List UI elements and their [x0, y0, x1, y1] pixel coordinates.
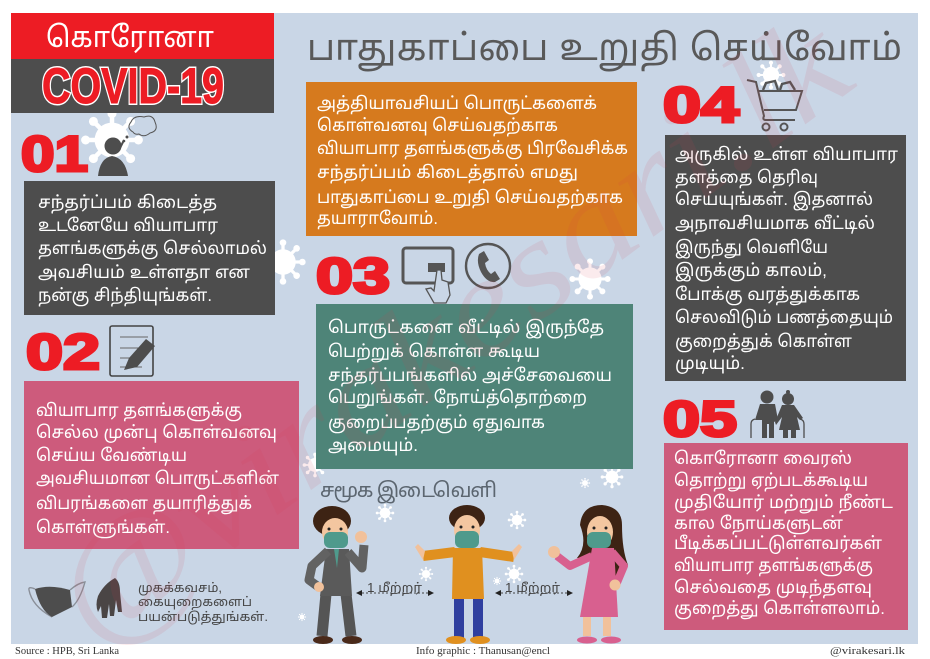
icon: elderly couple [751, 390, 804, 438]
panel: step 02: செய்ய வேண்டிய [36, 446, 187, 466]
panel: step 04: தளத்தை தெரிவு [675, 168, 818, 188]
icon: face mask [29, 582, 85, 617]
panel: step 04: அருகில் உள்ள வியாபார [675, 145, 898, 166]
panel: intro orange: கொள்வனவு செய்வதற்காக [317, 116, 558, 137]
icon: shopping cart [747, 80, 802, 130]
panel: step 01: தளங்களுக்கு செல்லாமல் [38, 239, 267, 260]
panel: step 04: இருந்து வெளியே [675, 238, 828, 259]
step 03 number: 03 [316, 248, 390, 304]
panel: step 03: பொருட்களை வீட்டில் இருந்தே [328, 318, 604, 339]
figure: man with arms outstretched [415, 505, 522, 644]
text: masks and gloves note: பயன்படுத்துங்கள். [138, 610, 268, 625]
panel: intro orange: பாதுகாப்பை உறுதி செய்வதற்காக [317, 188, 623, 209]
panel: step 05: முதியோர் மற்றும் நீண்ட [674, 493, 893, 514]
panel: step 04: அநாவசியமாக வீட்டில் [675, 214, 875, 235]
panel: step 02: அவசியமான பொருட்களின் [36, 469, 279, 490]
text: masks and gloves note [138, 581, 268, 625]
panel: step 01 [24, 181, 275, 315]
icon: tablet with hand [403, 248, 453, 303]
icon: telephone [466, 244, 510, 288]
step 05 number: 05 [663, 391, 737, 447]
panel: step 04: செலவிடும் பணத்தையும் [675, 308, 893, 329]
header: COVID-19 band: COVID-19 [42, 58, 224, 114]
distance marker: 1 metre right [495, 581, 573, 596]
step 04 number: 04 [663, 77, 739, 133]
panel: intro orange: வியாபார தளங்களுக்கு பிரவேசிக்க [317, 139, 628, 160]
distance marker: 1 metre left: 1 மீற்றர் [367, 581, 422, 596]
header: COVID-19 band: COVID-19 [42, 58, 224, 114]
panel: step 04: குறைத்துக் கொள்ள [675, 332, 852, 353]
figure: man in suit [309, 506, 367, 644]
watermark: @virakesari.lk [21, 0, 880, 659]
panel: step 03: குறைப்பதற்கும் ஏதுவாக [328, 413, 545, 434]
text: masks and gloves note: முகக்கவசம், [138, 581, 222, 596]
panel: step 03: பெற்றுக் கொள்ள கூடிய [328, 342, 540, 363]
decorative virus particles [81, 61, 785, 621]
icon: glove [96, 578, 122, 618]
panel: step 03 [316, 304, 633, 469]
icon: note and pencil [110, 326, 155, 376]
panel: step 04 [665, 135, 906, 381]
distance marker: 1 metre left [356, 581, 434, 596]
panel: step 02: கொள்ளுங்கள். [36, 518, 170, 539]
step 01 number: 01 [21, 126, 88, 182]
title: பாதுகாப்பை உறுதி செய்வோம் [307, 27, 902, 72]
panel: step 02: வியாபார தளங்களுக்கு [36, 401, 242, 422]
social handle: @virakesari.lk [830, 645, 906, 657]
step 02 number: 02 [26, 324, 100, 380]
panel: step 03: சந்தர்ப்பங்களில் அச்சேவையை [328, 366, 612, 387]
panel: step 05 [664, 443, 908, 630]
panel: step 05: கொரோனா வைரஸ் [674, 449, 852, 468]
panel: step 01: நன்கு சிந்தியுங்கள். [38, 286, 212, 307]
panel: step 05: தொற்று ஏற்படக்கூடிய [674, 471, 868, 492]
panel: step 04: செய்யுங்கள். இதனால் [675, 190, 873, 211]
heading: social distance: சமூக இடைவெளி [320, 480, 497, 504]
panel: step 02: விபரங்களை தயாரித்துக் [36, 494, 252, 515]
figure: woman in pink dress [548, 505, 628, 644]
panel: step 03: அமையும். [328, 436, 418, 456]
panel: step 01: சந்தர்ப்பம் கிடைத்த [38, 193, 217, 214]
panel: step 02: செல்ல முன்பு கொள்வனவு [36, 423, 277, 444]
panel: step 01: அவசியம் உள்ளதா என [38, 263, 250, 283]
header: red title band [11, 13, 274, 59]
panel: step 05: பீடிக்கப்பட்டுள்ளவர்கள் [674, 534, 882, 555]
panel: step 02 [24, 381, 299, 549]
text: masks and gloves note: கையுறைகளைப் [138, 595, 252, 610]
panel: step 05: செல்வதை முடிந்தளவு [674, 578, 872, 599]
icon: thinking person [98, 116, 156, 176]
panel: intro orange [306, 82, 637, 236]
panel: step 05: கால நோய்களுடன் [674, 514, 843, 535]
distance marker: 1 metre right: 1 மீற்றர் [505, 581, 560, 596]
infographic credit: Info graphic : Thanusan@encl [416, 645, 550, 657]
panel: intro orange: சந்தர்ப்பம் கிடைத்தால் எமது [317, 163, 578, 184]
panel: step 04: இருக்கும் காலம், [675, 261, 827, 282]
header: red title band: கொரோனா [46, 22, 214, 54]
panel: step 05: வியாபார தளங்களுக்கு [674, 556, 873, 577]
panel: intro orange: தயாராவோம். [317, 209, 438, 229]
source credit: Source : HPB, Sri Lanka [15, 645, 119, 657]
panel: step 01: உடனேயே வியாபார [38, 216, 218, 235]
panel: intro orange: அத்தியாவசியப் பொருட்களைக் [317, 94, 597, 115]
panel: step 05: குறைத்து கொள்ளலாம். [674, 599, 885, 620]
panel: step 04: முடியும். [675, 354, 745, 375]
panel: step 03: பெறுங்கள். நோய்த்தொற்றை [328, 388, 587, 409]
panel: step 04: போக்கு வரத்துக்காக [675, 285, 860, 306]
